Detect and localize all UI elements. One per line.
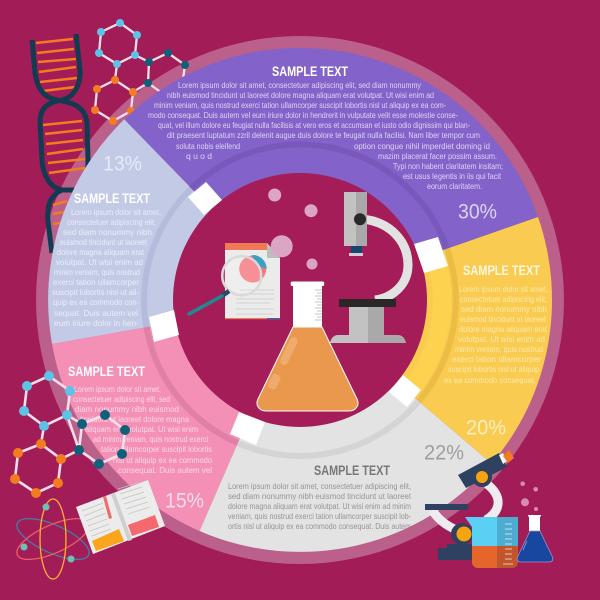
body text: pink: consequat. Duis autem vel [118, 465, 212, 475]
body text: lavender: dolore magna aliquam erat [57, 247, 145, 257]
body text: pink [73, 384, 212, 475]
icon: lower-left molecule [10, 371, 130, 498]
donut chart segments [48, 48, 552, 552]
body text: yellow: sed diam nonummy nibh [461, 304, 547, 314]
body text: lavender [52, 207, 161, 328]
body text: purple: quat, vel illum dolore eu feugiat nulla facilisis at vero eros et accumsan et iusto odio dignissim qui blan- [158, 120, 470, 130]
body text: grey: Lorem ipsum dolor sit amet, consectetuer adipiscing elit, [228, 481, 411, 491]
body text: pink: aliquam erat volutpat. Ut wisi enim [85, 424, 198, 434]
outer translucent ring [36, 36, 564, 564]
body text: lavender: sed diam nonummy nibh [63, 227, 152, 237]
body text: purple: Lorem ipsum dolor sit amet, consectetuer adipiscing elit, sed diam nonummy [178, 80, 422, 90]
body text: pink: consectetuer adipiscing elit, sed [73, 394, 170, 404]
body text: pink: diam nonummy nibh euismod [75, 404, 179, 414]
body text: purple: modo consequat. Duis autem vel eum iriure dolor in hendrerit in vulputate velit esse molestie conse- [148, 110, 458, 120]
body text: grey: dolore magna aliquam erat volutpat. Ut wisi enim ad minim [228, 501, 411, 511]
icon: center bubbles [268, 188, 318, 270]
body text: purple: est usus legentis in iis qui facit [403, 171, 502, 181]
body text: purple [148, 80, 503, 191]
body text: pink: ad minim veniam, quis nostrud exerci [93, 434, 208, 444]
body text: grey: ortis nisl ut aliquip ex ea commodo consequat. Duis autem [228, 521, 411, 531]
body text: grey [228, 481, 412, 531]
body text: lavender: quip ex ea commodo con- [53, 297, 139, 307]
body text: yellow: volutpat. Ut wisi enim ad [458, 334, 545, 344]
body text: yellow: dolore magna aliquam erat [459, 324, 548, 334]
icon: top molecule [91, 19, 189, 125]
percent: 15%: 15% [165, 490, 204, 512]
body text: pink: tation ullamcorper suscipit lobortis [101, 444, 212, 454]
heading: pink: SAMPLE TEXT [68, 364, 146, 379]
icon: small blue flask [517, 515, 553, 562]
inner darker band [144, 144, 456, 456]
body text: grey: sed diam nonummy nibh euismod tincidunt ut laoreet [228, 491, 412, 501]
body text: lavender: consectetuer adipiscing elit, [67, 217, 156, 227]
body text: yellow: consectetuer adipiscing elit, [460, 294, 547, 304]
segment: grey 22% [200, 300, 492, 552]
body text: grey: veniam, quis nostrud exerci tation ullamcorper suscipit lob- [228, 511, 411, 521]
body text: purple: mazim placerat facer possim assum. [378, 151, 497, 161]
heading: grey: SAMPLE TEXT [314, 463, 391, 478]
body text: lavender: eum iriure dolor in hen- [54, 318, 139, 328]
center hole [173, 173, 427, 427]
icon: DNA helix [32, 34, 88, 253]
body text: yellow: exerci tation ullamcorper [452, 354, 541, 364]
panel text: yellow [444, 263, 548, 440]
icon: large microscope [330, 192, 408, 343]
white separators [149, 182, 448, 445]
body text: purple: dit praesent luptatum zzril delenit augue duis dolore te feugait nulla facilisi. Nam liber tempor cum [167, 130, 480, 140]
heading: yellow: SAMPLE TEXT [463, 263, 541, 278]
panel text: purple [148, 64, 503, 224]
segment: pink 15% [52, 300, 300, 531]
body text: pink: Lorem ipsum dolor sit amet, [74, 384, 161, 394]
icon: small bubbles [520, 481, 538, 511]
body text: purple: soluta nobis eleifend [176, 141, 240, 151]
percent: 30%: 30% [458, 200, 497, 224]
body text: yellow [444, 284, 548, 385]
body text: lavender: minim veniam, quis nostrud [54, 267, 140, 277]
body text: lavender: sequat. Duis autem vel [54, 308, 138, 318]
body text: yellow: Lorem ipsum dolor sit amet, [459, 284, 548, 294]
icon: report with magnifier [189, 235, 293, 319]
percent: 22%: 22% [424, 442, 464, 464]
panel text: lavender [52, 152, 161, 328]
segment: yellow 20% [300, 217, 552, 464]
body text: lavender: suscipit lobortis nisl ut ali- [52, 287, 139, 297]
icon: beaker [465, 517, 518, 568]
icon: atom [12, 499, 94, 579]
body text: purple: minim veniam, quis nostrud exerci tation ullamcorper suscipit lobortis nisl ut aliquip ex ea com- [154, 100, 446, 110]
body text: purple: Typi non habent claritatem insitam; [393, 161, 503, 171]
panel text: grey [228, 442, 464, 531]
body text: yellow: minim veniam, quis nostrud [455, 344, 543, 354]
body text: purple: quod [186, 151, 212, 161]
heading: purple: SAMPLE TEXT [272, 64, 349, 79]
body text: lavender: exerci tation ullamcorper [53, 277, 139, 287]
percent: 13%: 13% [103, 152, 142, 176]
body text: lavender: volutpat. Ut wisi enim ad [56, 257, 143, 267]
body text: purple: eorum claritatem. [427, 181, 482, 191]
percent: 20%: 20% [466, 416, 506, 440]
segment: purple 30% [124, 48, 538, 300]
body text: pink: tincidunt ut laoreet dolore magna [80, 414, 189, 424]
heading: lavender: SAMPLE TEXT [74, 191, 151, 206]
icon: small microscope [425, 450, 514, 560]
panel text: pink [68, 364, 212, 512]
inner lighter yellow band [405, 251, 451, 397]
segment: lavender 13% [48, 119, 300, 344]
body text: yellow: ex ea commodo consequat. [444, 375, 536, 385]
body text: purple: option congue nihil imperdiet doming id [354, 141, 490, 151]
body text: pink: nisl ut aliquip ex ea commodo [113, 455, 212, 465]
body text: yellow: euismod tincidunt ut laoreet [460, 314, 546, 324]
body text: lavender: Lorem ipsum dolor sit amet, [71, 207, 161, 217]
body text: purple: nibh euismod tincidunt ut laoreet dolore magna aliquam erat volutpat. Ut wisi enim ad [167, 90, 434, 100]
body text: yellow: suscipit lobortis nisl ut aliquip [448, 364, 539, 374]
icon: open book [76, 480, 165, 554]
body text: lavender: euismod tincidunt ut laoreet [60, 237, 147, 247]
icon: erlenmeyer flask [257, 282, 358, 411]
